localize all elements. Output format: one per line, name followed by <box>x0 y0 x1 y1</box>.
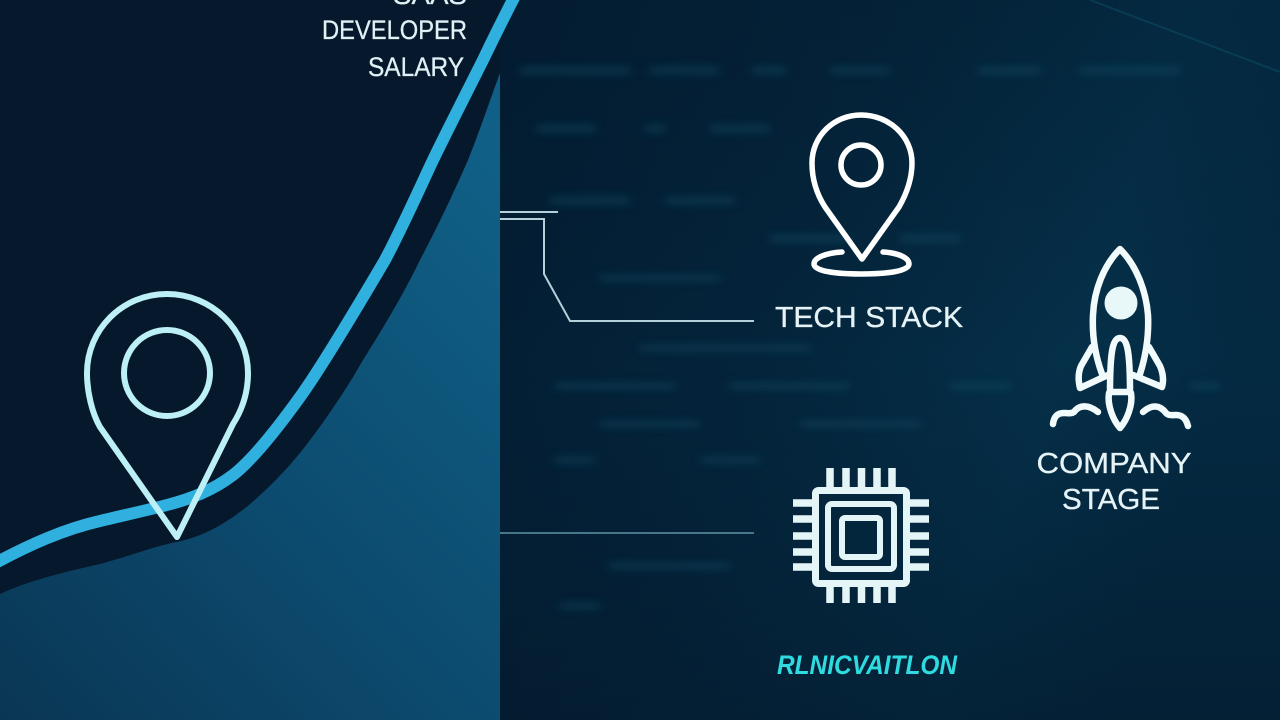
area under salary curve <box>0 73 500 720</box>
label: company stage <box>1036 448 1192 516</box>
faint diagonal streak <box>1090 0 1280 72</box>
label: garbled location text: RLNICVAITLON <box>777 650 957 680</box>
connector line to chip <box>500 532 754 534</box>
title: SaaS developer salary: SALARY <box>368 52 464 82</box>
icon: microchip <box>793 468 929 603</box>
salary growth curve <box>0 0 517 566</box>
label: company stage: COMPANY <box>1036 448 1192 480</box>
left panel background <box>0 0 500 720</box>
label: tech stack: TECH STACK <box>775 302 964 334</box>
blurred background code lines <box>520 66 1220 610</box>
icon: rocket <box>1053 249 1188 428</box>
title: SaaS developer salary: DEVELOPER <box>322 15 467 45</box>
connector lines to tech stack <box>500 212 754 321</box>
icon: tech stack location pin <box>812 115 912 274</box>
label: company stage: STAGE <box>1062 484 1160 516</box>
icon: large location pin <box>87 294 248 537</box>
right panel background <box>500 0 1280 720</box>
title: SaaS developer salary <box>322 0 467 82</box>
